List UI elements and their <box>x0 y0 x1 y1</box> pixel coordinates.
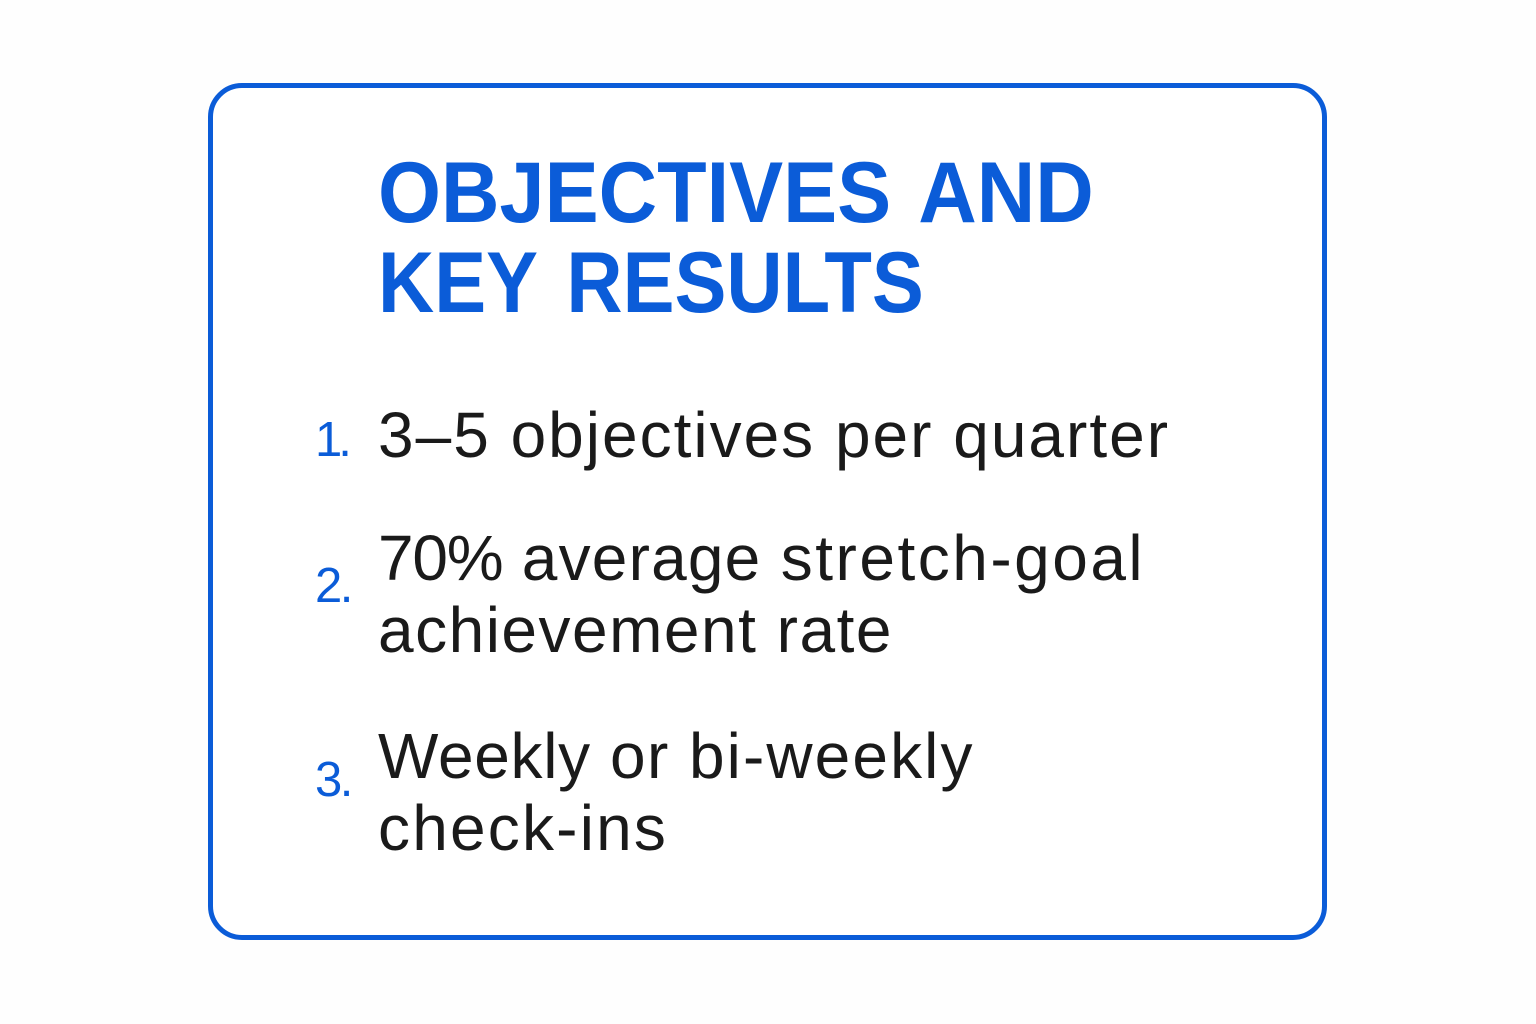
list number 2: 2. <box>315 559 351 613</box>
list number 3: 3. <box>315 753 351 807</box>
item 3 text <box>378 720 975 864</box>
item 3 text: check-ins <box>378 792 668 864</box>
item 3 text: Weekly or bi-weekly <box>378 720 975 792</box>
panel: card <box>208 83 1327 940</box>
list number 1: 1. <box>315 413 348 467</box>
item 2 text <box>378 522 1145 666</box>
title: KEY RESULTS <box>378 235 924 331</box>
item 1 text: 3–5 objectives per quarter <box>378 399 1170 471</box>
item 2 text: 70% average stretch-goal <box>378 522 1145 594</box>
item 2 text: achievement rate <box>378 594 893 666</box>
title: OBJECTIVES AND <box>378 145 1094 241</box>
title <box>378 145 1094 331</box>
